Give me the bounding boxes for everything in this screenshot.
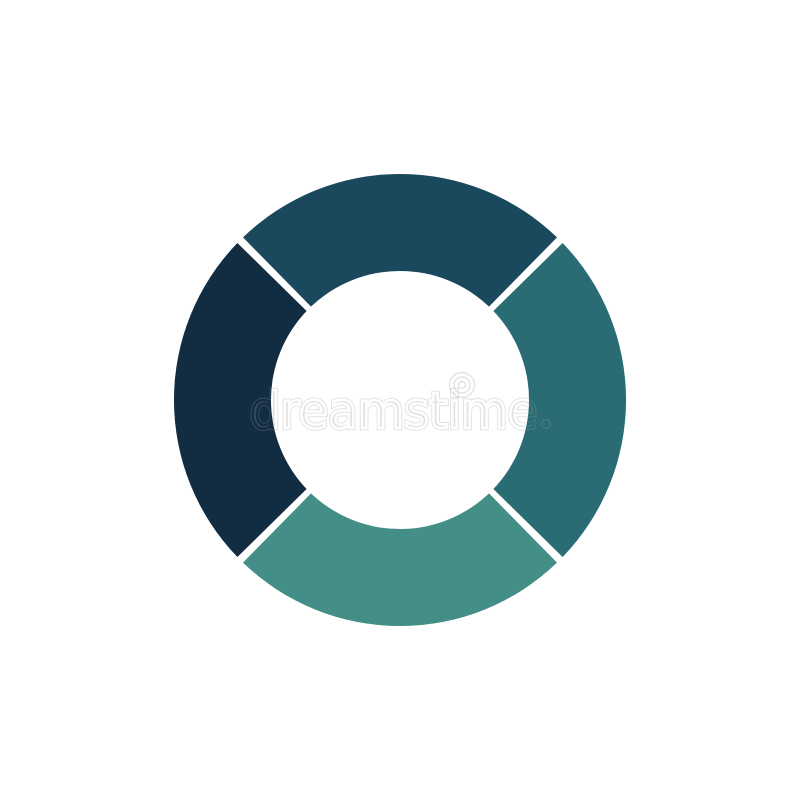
watermark text: dreamstime — [250, 382, 537, 440]
segment: bottom — [243, 493, 557, 626]
watermark icon: swirl — [450, 372, 474, 398]
donut chart infographic — [174, 174, 626, 626]
segment: top — [243, 174, 557, 307]
segment: right — [493, 243, 626, 557]
segment: left — [174, 243, 307, 557]
watermark — [250, 372, 552, 431]
watermark registered mark — [542, 420, 550, 428]
